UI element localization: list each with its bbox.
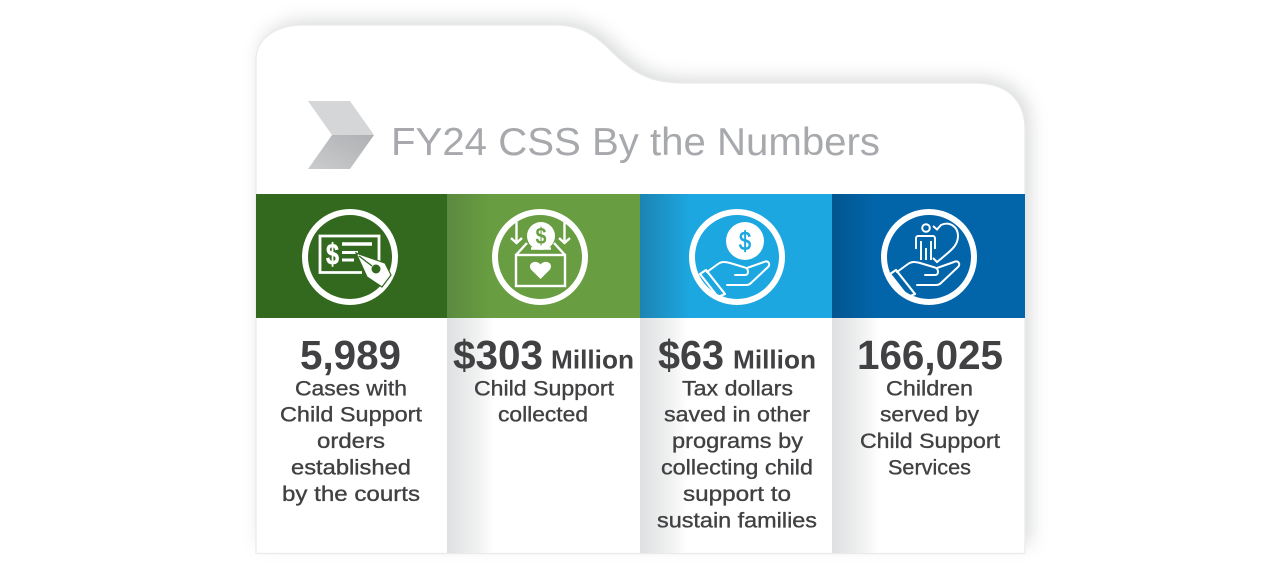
folder shadow <box>261 21 1030 544</box>
stat: tax dollars saved: support to <box>683 482 791 506</box>
stat: tax dollars saved: $63 <box>658 332 724 378</box>
stat: cases established: by the courts <box>282 482 420 506</box>
panel: colour bands <box>256 194 1025 318</box>
column shading below the bands <box>447 318 880 553</box>
stat: child support collected: Child Support <box>474 376 614 400</box>
stat: cases established: Cases with <box>295 376 407 400</box>
stat: cases established: 5,989 <box>300 332 401 378</box>
panel: folder <box>256 25 1025 554</box>
stat: children served <box>857 332 1003 480</box>
stat: children served: Children <box>886 376 973 400</box>
icon: donation box <box>495 212 585 302</box>
title: FY24 CSS By the Numbers <box>391 121 880 164</box>
stat: cases established: Child Support <box>280 402 422 426</box>
icon: cheque and pen <box>305 212 395 302</box>
stat: tax dollars saved: programs by <box>672 429 803 453</box>
stat: cases established: orders <box>317 429 385 453</box>
stat: children served: Child Support <box>860 429 1000 453</box>
stat: tax dollars saved: Tax dollars <box>682 376 793 400</box>
stat: tax dollars saved <box>657 332 817 532</box>
icon: donation box: $ <box>536 223 547 249</box>
stat: cases established <box>280 332 422 506</box>
stat: tax dollars saved: saved in other <box>664 402 810 426</box>
stat: cases established: established <box>291 456 411 480</box>
stat: children served: 166,025 <box>857 332 1003 378</box>
icon: cheque and pen: $ <box>326 238 339 272</box>
icon: chevron <box>308 101 374 169</box>
icon: person, heart and hand <box>884 212 974 302</box>
stat: tax dollars saved: Million <box>733 344 816 374</box>
stat: tax dollars saved: collecting child <box>661 456 813 480</box>
icon: coin over hand: $ <box>739 226 751 256</box>
stat: children served: Services <box>888 456 971 480</box>
stat: children served: served by <box>880 402 979 426</box>
stat: child support collected: Million <box>551 344 634 374</box>
stat: child support collected: $303 <box>453 332 543 378</box>
stat: child support collected <box>453 332 634 426</box>
stat: child support collected: collected <box>498 402 588 426</box>
icon: coin over hand <box>692 212 782 302</box>
stat: tax dollars saved: sustain families <box>657 508 817 532</box>
